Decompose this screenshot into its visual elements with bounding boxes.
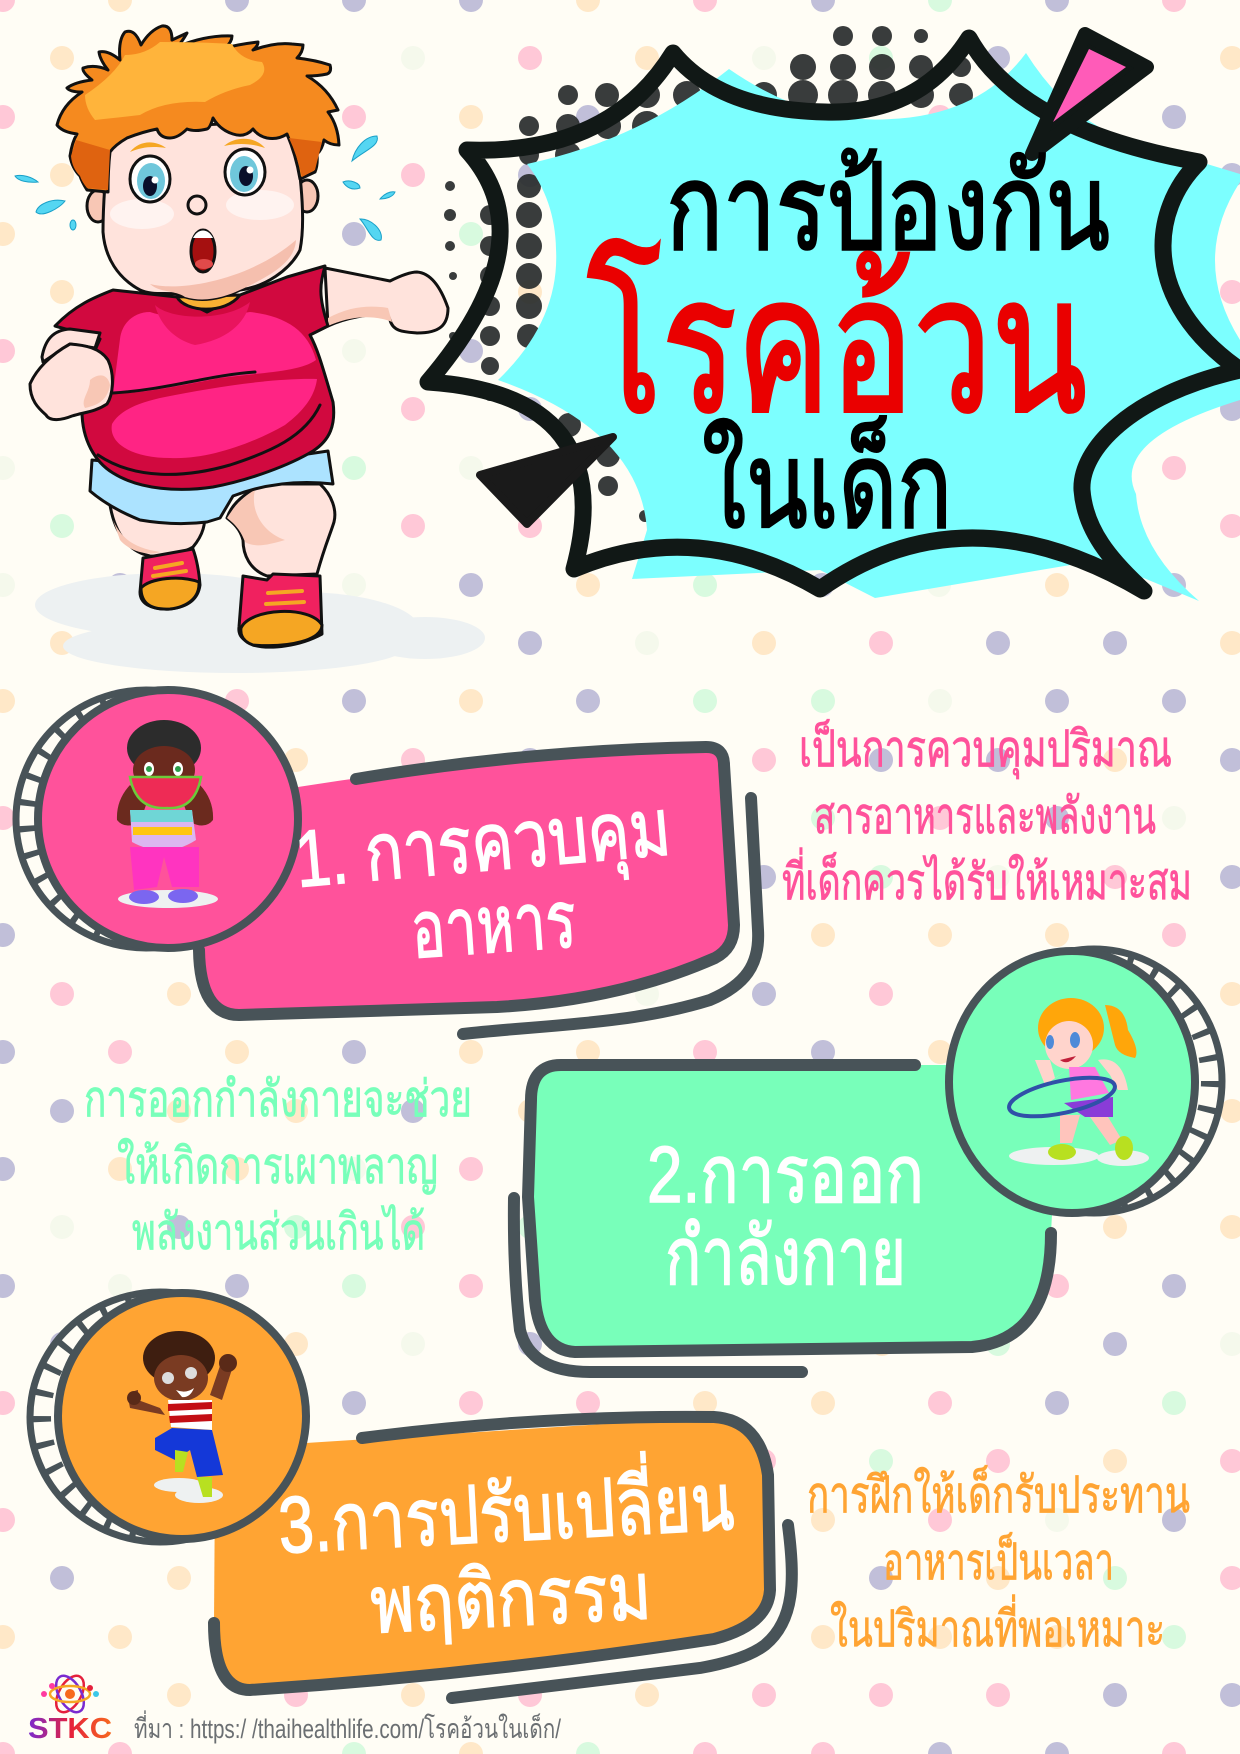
title: ในเด็ก (702, 415, 952, 553)
banner heading: 3.การปรับเปลี่ยน (276, 1447, 736, 1570)
icon: sweat drops (15, 136, 395, 240)
banner shape (514, 1065, 1060, 1372)
banner heading: พฤติกรรม (368, 1546, 654, 1650)
description: behaviour change: อาหารเป็นเวลา (883, 1532, 1114, 1590)
icon: colourful atom logo (41, 1671, 99, 1717)
illustration: halftone dots behind burst (444, 26, 973, 522)
badge circle with child eating watermelon (16, 690, 298, 948)
description: exercise: การออกกำลังกายจะช่วย (84, 1071, 472, 1127)
banner heading: กำลังกาย (665, 1212, 906, 1301)
description: exercise (84, 1071, 472, 1260)
illustration: shadow under boy (35, 573, 485, 673)
badge circle with jumping boy (30, 1292, 306, 1542)
description: food control (782, 719, 1192, 910)
burst: black spiky outline (428, 38, 1240, 591)
icon: black pointer triangle (480, 437, 613, 524)
illustration: running overweight boy (30, 26, 448, 647)
icon: pink pointer triangle (1032, 34, 1147, 154)
banner heading: 2.การออก (647, 1130, 924, 1219)
panel: exercise (514, 949, 1222, 1372)
title: การป้องกัน (666, 141, 1110, 275)
panel: behaviour change (30, 1292, 792, 1698)
banner heading: อาหาร (408, 875, 579, 975)
banner heading (647, 1130, 924, 1301)
source line: ที่มา : https:/ /thaihealthlife.com/โรคอ้วนในเด็ก/ (134, 1710, 561, 1744)
banner shape (190, 747, 758, 1034)
logo text: STKC (28, 1713, 112, 1745)
banner heading (276, 1447, 736, 1650)
banner heading (292, 783, 674, 975)
description: exercise: พลังงานส่วนเกินได้ (132, 1204, 425, 1260)
badge circle with girl hula hooping (949, 949, 1222, 1213)
panel: food control (16, 690, 758, 1034)
burst: cyan background (498, 53, 1240, 601)
title (587, 141, 1110, 553)
description: behaviour change (807, 1465, 1190, 1657)
banner heading: 1. การควบคุม (292, 783, 674, 908)
description: exercise: ให้เกิดการเผาพลาญ (117, 1138, 438, 1194)
banner shape (214, 1417, 792, 1698)
